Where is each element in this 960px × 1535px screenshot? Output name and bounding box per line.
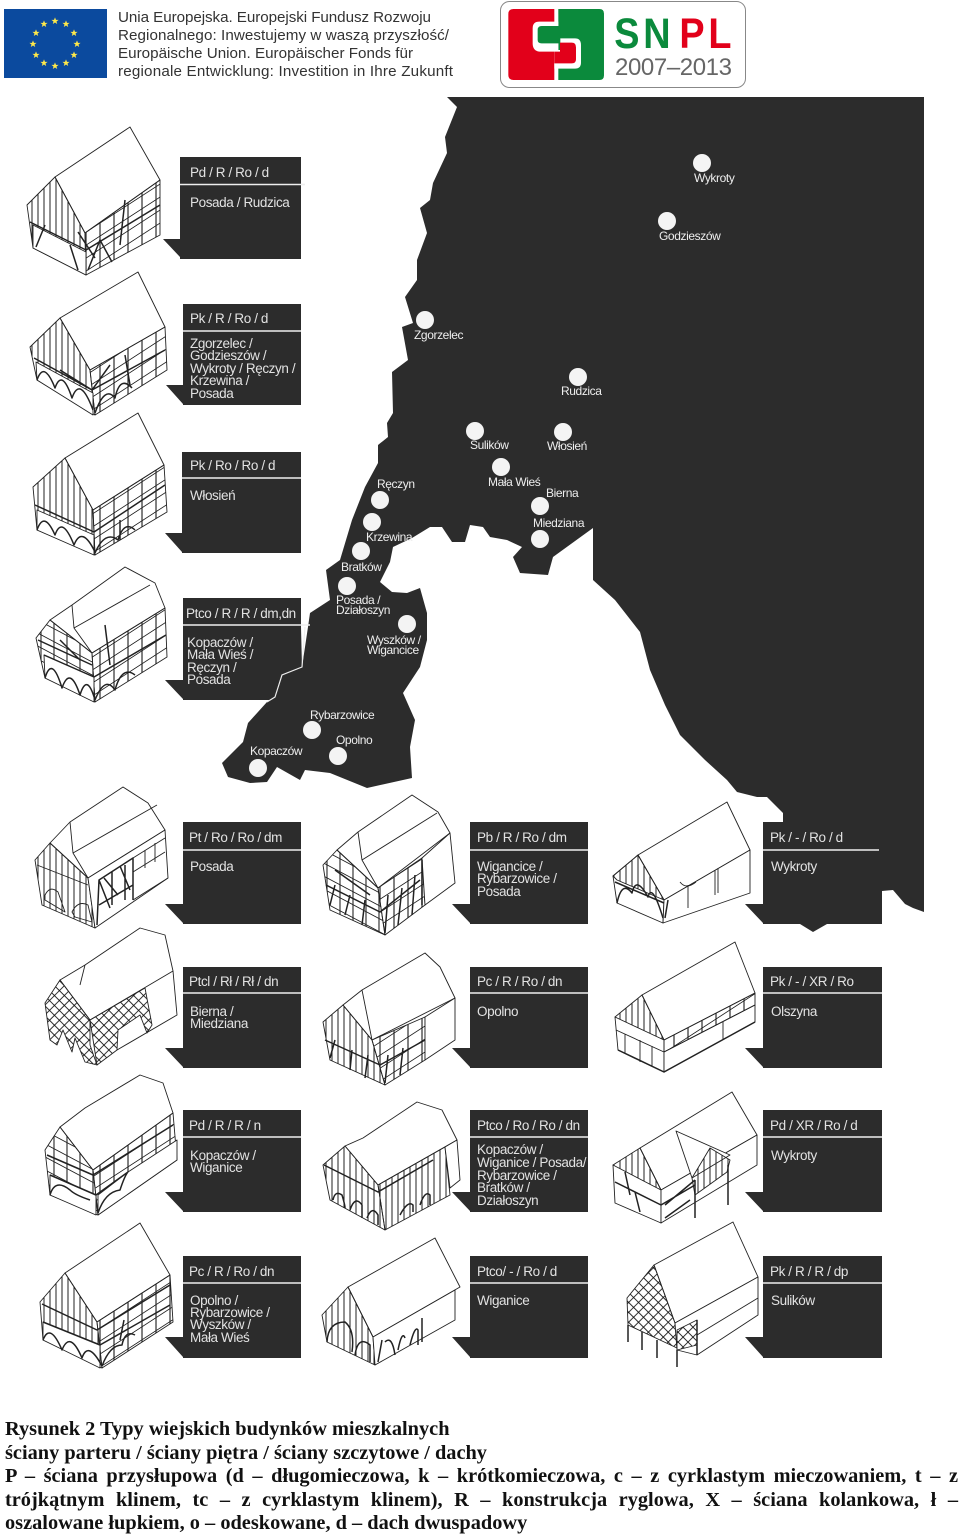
label box 12: Bratków /: [477, 1180, 530, 1195]
house 6: [323, 795, 455, 935]
label box 16: Sulików: [771, 1293, 815, 1308]
house 3: [33, 413, 167, 555]
label box 8: [165, 967, 301, 1068]
house 2: [30, 272, 167, 415]
label box 6: Posada: [477, 884, 521, 899]
label box 15: [452, 1256, 588, 1358]
map locations: Zgorzelec: [414, 328, 463, 342]
EU flag: [4, 9, 107, 78]
house 13: [613, 1092, 757, 1223]
label box 11: Pd / R / R / n: [189, 1118, 261, 1133]
label box 14: [165, 1256, 301, 1358]
label box 3: [165, 452, 301, 553]
label box 2: [166, 304, 301, 405]
label box 9: Pc / R / Ro / dn: [477, 974, 562, 989]
label box 14: Opolno /: [190, 1293, 238, 1308]
map locations: Bierna: [546, 486, 579, 500]
map locations: Kopaczów: [250, 744, 303, 758]
label box 4: Posada: [187, 672, 231, 687]
label box 13: Wykroty: [771, 1148, 817, 1163]
label box 15: Ptco/ - / Ro / d: [477, 1264, 557, 1279]
funding text: regionale Entwicklung: Investition in Ihre Zukunft: [118, 63, 454, 80]
SNPL logo: 2007–2013: [615, 54, 732, 81]
house 16: [627, 1222, 758, 1367]
label box 10: Olszyna: [771, 1004, 818, 1019]
label box 12: Rybarzowice /: [477, 1168, 557, 1183]
map locations: [249, 154, 735, 777]
funding text: [118, 9, 454, 80]
label box 16: Pk / R / R / dp: [770, 1264, 848, 1279]
label box 8: Ptcl / Rł / Rł / dn: [189, 974, 278, 989]
label box 9: Opolno: [477, 1004, 518, 1019]
house 8: [45, 928, 177, 1065]
house 12: [323, 1102, 460, 1230]
map locations: Godzieszów: [659, 229, 721, 243]
label box 14: Wyszków /: [190, 1317, 251, 1332]
label box 12: Wiganice / Posada/: [477, 1155, 587, 1170]
label box 1: Pd / R / Ro / d: [190, 165, 269, 180]
map locations: Rybarzowice: [310, 708, 375, 722]
label box 11: [165, 1110, 301, 1212]
map locations: Sulików: [470, 438, 509, 452]
label box 4: Kopaczów /: [187, 635, 253, 650]
map locations: Rudzica: [561, 384, 602, 398]
label box 1: Posada / Rudzica: [190, 195, 290, 210]
label box 5: [165, 822, 301, 924]
label box 12: Kopaczów /: [477, 1142, 543, 1157]
figure caption: ściany parteru / ściany piętra / ściany szczytowe / dachy: [5, 1442, 487, 1464]
house 10: [615, 942, 755, 1072]
map locations: Ręczyn: [377, 477, 415, 491]
label box 13: [745, 1110, 882, 1212]
label box 14: Pc / R / Ro / dn: [189, 1264, 274, 1279]
label box 10: Pk / - / XR / Ro: [770, 974, 854, 989]
label box 6: [452, 822, 588, 924]
label box 2: Wykroty / Ręczyn /: [190, 361, 296, 376]
label box 4: Ręczyn /: [187, 660, 237, 675]
label box 10: [745, 967, 882, 1068]
figure caption: P – ściana przysłupowa (d – długomieczowa, k – krótkomieczowa, c – z cyrklastym mieczowaniem, t – z: [5, 1465, 958, 1487]
label box 3: Pk / Ro / Ro / d: [190, 458, 275, 473]
figure caption: oszalowane łupkiem, o – odeskowane, d – dach dwuspadowy: [5, 1512, 527, 1534]
label box 7: [745, 822, 882, 924]
label box 2: Zgorzelec /: [190, 336, 253, 351]
figure caption: [5, 1418, 958, 1534]
figure caption: trójkątnym klinem, tc – z cyrklastym klinem), R – konstrukcja ryglowa, X – ściana kolankowa, ł –: [5, 1488, 958, 1510]
map locations: Krzewina: [366, 530, 413, 544]
map locations: Opolno: [336, 733, 373, 747]
house 15: [322, 1238, 460, 1365]
label box 14: Mała Wieś: [190, 1330, 250, 1345]
label box 3: Włosień: [190, 488, 235, 503]
label box 1: [163, 157, 305, 259]
funding text: Europäische Union. Europäischer Fonds für: [118, 45, 413, 62]
house 1: [27, 127, 160, 275]
map locations: Włosień: [547, 439, 587, 453]
map locations: Miedziana: [533, 516, 585, 530]
label box 13: Pd / XR / Ro / d: [770, 1118, 857, 1133]
label box 7: Wykroty: [771, 859, 817, 874]
label box 5: Posada: [190, 859, 234, 874]
label box 2: Pk / R / Ro / d: [190, 311, 268, 326]
label box 2: Godzieszów /: [190, 348, 267, 363]
label box 6: Rybarzowice /: [477, 871, 557, 886]
funding text: Regionalnego: Inwestujemy w waszą przyszłość/: [118, 27, 450, 44]
map locations: Wykroty: [694, 171, 735, 185]
funding text: Unia Europejska. Europejski Fundusz Rozwoju: [118, 9, 431, 26]
SNPL logo: SNPL: [614, 9, 732, 58]
SNPL logo: [500, 2, 746, 88]
label box 11: Wiganice: [190, 1160, 242, 1175]
label box 6: Wigancice /: [477, 859, 543, 874]
label box 12: Ptco / Ro / Ro / dn: [477, 1118, 580, 1133]
label box 2: Krzewina /: [190, 373, 250, 388]
label box 11: Kopaczów /: [190, 1148, 256, 1163]
map locations: Posada /: [336, 593, 381, 607]
house 11: [45, 1075, 177, 1215]
house 7: [613, 802, 750, 923]
label box 12: Działoszyn: [477, 1193, 538, 1208]
label box 8: Miedziana: [190, 1016, 249, 1031]
house 4: [36, 567, 167, 702]
map locations: Wigancice: [367, 643, 419, 657]
label box 7: Pk / - / Ro / d: [770, 830, 843, 845]
label box 2: Posada: [190, 386, 234, 401]
map locations: Mała Wieś: [488, 475, 541, 489]
house 5: [35, 787, 168, 928]
label box 4: Mała Wieś /: [187, 647, 254, 662]
map locations: Działoszyn: [336, 603, 390, 617]
map locations: Bratków: [341, 560, 382, 574]
label box 8: Bierna /: [190, 1004, 234, 1019]
map locations: Wyszków /: [367, 633, 422, 647]
label box 14: Rybarzowice /: [190, 1305, 270, 1320]
map of the region: [222, 97, 924, 932]
label box 5: Pt / Ro / Ro / dm: [189, 830, 282, 845]
label box 6: Pb / R / Ro / dm: [477, 830, 567, 845]
label box 15: Wiganice: [477, 1293, 529, 1308]
label box 12: [452, 1110, 588, 1212]
label box 4: Ptco / R / R / dm,dn: [186, 606, 296, 621]
label box 16: [745, 1256, 882, 1358]
label box 4: [165, 598, 310, 702]
label box 9: [452, 967, 588, 1068]
house 9: [323, 953, 455, 1085]
figure caption: Rysunek 2 Typy wiejskich budynków mieszkalnych: [5, 1418, 450, 1440]
house 14: [40, 1223, 173, 1368]
